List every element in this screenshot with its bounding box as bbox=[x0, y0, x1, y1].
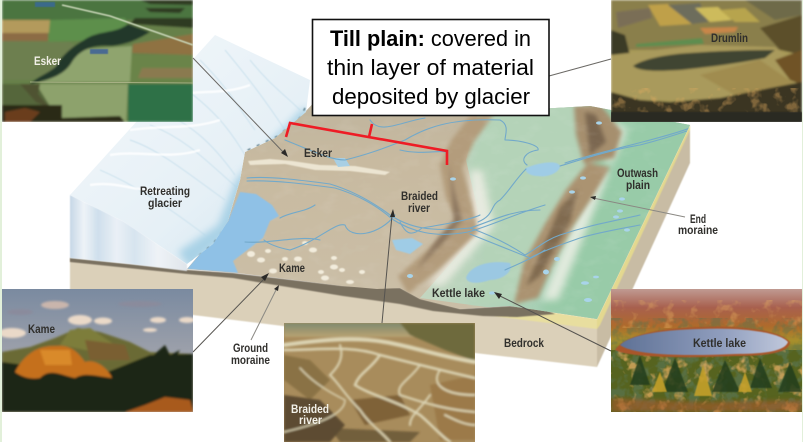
red bracket: till plain extent bbox=[286, 123, 447, 165]
label: Ground moraine bbox=[231, 343, 270, 367]
block diagram: glacial landscape bbox=[60, 30, 700, 367]
meltwater streams bbox=[245, 118, 690, 270]
label: Outwash plain: Outwash bbox=[617, 168, 658, 180]
label: Esker photo: Esker bbox=[34, 56, 61, 68]
proglacial lake bbox=[187, 192, 279, 273]
label: Drumlin photo: Drumlin bbox=[711, 33, 748, 45]
label: Braided river bbox=[401, 191, 438, 215]
clouds bbox=[0, 301, 195, 338]
photo: kettle lake bbox=[611, 289, 802, 412]
leader: braided river photo to river bbox=[382, 209, 395, 323]
texture on land bbox=[446, 196, 574, 263]
label: Bedrock: Bedrock bbox=[504, 338, 545, 350]
ground moraine layer bbox=[70, 258, 555, 317]
photo: kame bbox=[0, 289, 195, 412]
outwash plain (green) bbox=[420, 106, 695, 325]
label: Kame photo: Kame bbox=[28, 324, 55, 336]
leader: kame photo to kame bbox=[193, 273, 269, 352]
leader: end moraine bbox=[590, 196, 685, 217]
label: Braided river photo bbox=[292, 404, 328, 424]
leader: kettle lake photo to kettle lake bbox=[494, 292, 611, 351]
bedrock block sides bbox=[70, 125, 690, 367]
label: Outwash plain: plain bbox=[626, 180, 650, 192]
label: Ground moraine: moraine bbox=[231, 355, 270, 367]
retreating glacier bbox=[70, 35, 310, 272]
kettle lakes bbox=[526, 162, 560, 176]
photo: braided river bbox=[284, 323, 475, 442]
pale wash beside moraines bbox=[428, 170, 494, 285]
label: Braided river: Braided bbox=[401, 191, 438, 203]
callout: till plain: thin layer of material bbox=[327, 55, 534, 80]
label: Outwash plain bbox=[617, 168, 658, 192]
label: Retreating glacier: Retreating bbox=[140, 186, 190, 198]
leader: ground moraine bbox=[251, 285, 279, 340]
label: Esker: Esker bbox=[304, 148, 332, 160]
label: Kame: Kame bbox=[279, 263, 305, 275]
leader: esker photo to esker bbox=[193, 58, 288, 157]
label: Kettle lake photo: Kettle lake bbox=[693, 338, 746, 350]
callout: till plain bbox=[312, 20, 549, 116]
label: Ground moraine: Ground bbox=[233, 343, 268, 355]
callout: till plain: deposited by glacier bbox=[332, 84, 530, 109]
glacier surface bbox=[70, 35, 310, 264]
label: Braided river: river bbox=[408, 203, 430, 215]
photo: esker bbox=[2, 0, 193, 122]
label: End moraine: moraine bbox=[678, 225, 718, 237]
label: Braided river photo: Braided bbox=[291, 404, 329, 416]
land surface bbox=[187, 104, 690, 319]
label: End moraine: End bbox=[690, 214, 706, 226]
callout: till plain: Till plain: covered in bbox=[330, 26, 531, 51]
label: Kettle lake: Kettle lake bbox=[432, 288, 485, 300]
photo: drumlin bbox=[611, 0, 802, 122]
kames bbox=[247, 241, 365, 284]
end moraine ridges bbox=[398, 104, 622, 304]
label: End moraine bbox=[678, 214, 718, 237]
label: Retreating glacier bbox=[140, 186, 190, 210]
kettle ponds bbox=[407, 121, 630, 302]
label: Braided river photo: river bbox=[299, 415, 322, 427]
label: Retreating glacier: glacier bbox=[148, 198, 182, 210]
ice cliff face bbox=[70, 195, 187, 271]
leader: drumlin photo to callout bbox=[549, 59, 611, 76]
esker ridge bbox=[248, 159, 390, 175]
